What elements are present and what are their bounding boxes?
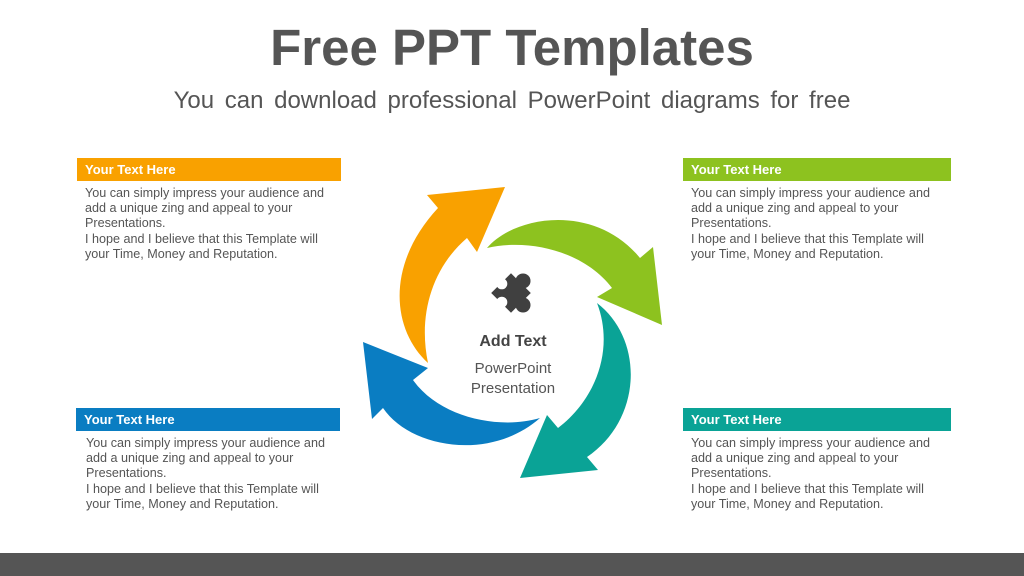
panel: top-left: your Time, Money and Reputation.	[85, 247, 278, 261]
panel: top-left: add a unique zing and appeal to your	[85, 201, 292, 215]
footer bar	[0, 553, 1024, 576]
panel: top-right: your Time, Money and Reputation.	[691, 247, 884, 261]
panel: top-left: You can simply impress your audience and	[85, 186, 324, 200]
center text	[471, 333, 555, 397]
panel: bottom-right: I hope and I believe that this Template will	[691, 482, 924, 496]
panel: top-right	[683, 158, 951, 261]
panel: bottom-left: your Time, Money and Reputation.	[86, 497, 279, 511]
panel: top-right: Presentations.	[691, 216, 772, 230]
panel: bottom-right: Presentations.	[691, 466, 772, 480]
panel: bottom-left	[76, 408, 340, 511]
arrow: orange	[400, 187, 505, 363]
arrow: teal	[520, 303, 631, 478]
panel: top-right: add a unique zing and appeal to your	[691, 201, 898, 215]
center text: Presentation	[471, 380, 555, 397]
panel: bottom-left: Your Text Here	[84, 412, 175, 427]
title: Free PPT Templates	[270, 19, 754, 76]
center text: PowerPoint	[475, 360, 552, 377]
panel: top-right: I hope and I believe that this Template will	[691, 232, 924, 246]
center text: Add Text	[479, 333, 547, 350]
panel: top-left: Presentations.	[85, 216, 166, 230]
panel: bottom-right	[683, 408, 951, 511]
arrow: blue	[363, 342, 540, 445]
panel: top-left: Your Text Here	[85, 162, 176, 177]
panel: top-right: You can simply impress your audience and	[691, 186, 930, 200]
subtitle: You can download professional PowerPoint diagrams for free	[174, 87, 850, 114]
panel: bottom-right: your Time, Money and Reputation.	[691, 497, 884, 511]
arrow: green	[487, 220, 662, 325]
panel: bottom-left: I hope and I believe that this Template will	[86, 482, 319, 496]
icon: puzzle piece	[485, 263, 546, 323]
panel: top-left	[77, 158, 341, 261]
panel: bottom-right: You can simply impress your audience and	[691, 436, 930, 450]
panel: top-right: Your Text Here	[691, 162, 782, 177]
panel: bottom-left: Presentations.	[86, 466, 167, 480]
panel: bottom-right: add a unique zing and appeal to your	[691, 451, 898, 465]
panel: bottom-left: You can simply impress your audience and	[86, 436, 325, 450]
panel: bottom-left: add a unique zing and appeal to your	[86, 451, 293, 465]
panel: bottom-right: Your Text Here	[691, 412, 782, 427]
panel: top-left: I hope and I believe that this Template will	[85, 232, 318, 246]
